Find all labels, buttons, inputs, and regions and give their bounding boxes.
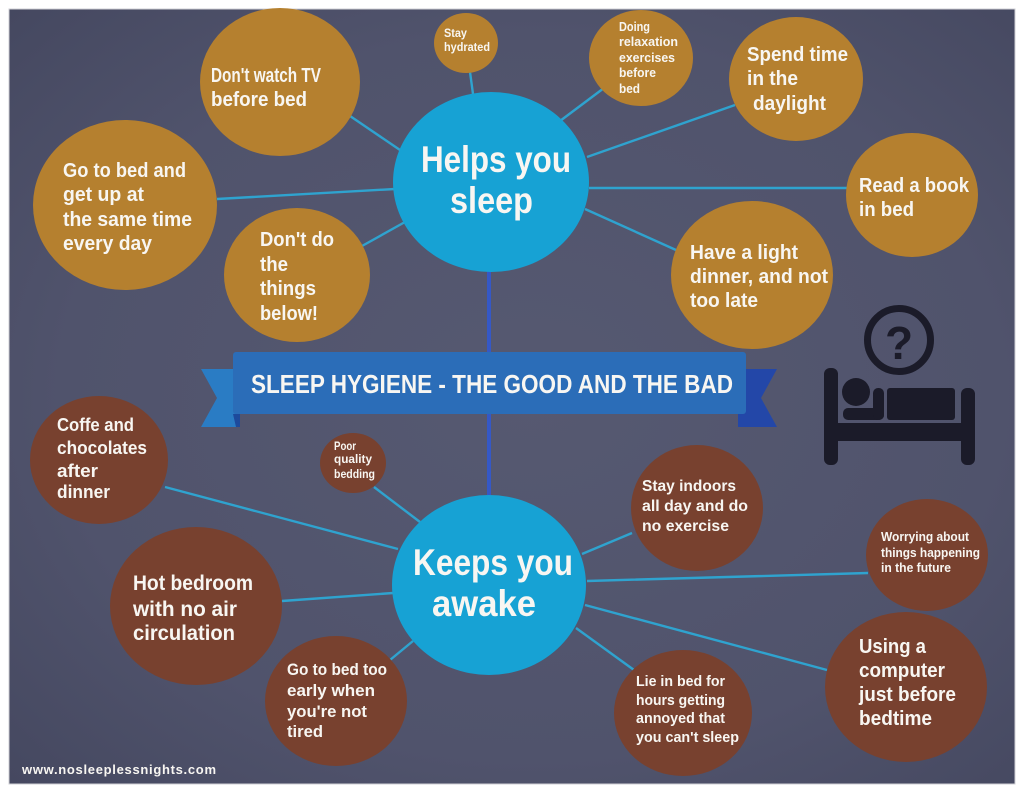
bubble: relaxation exercises: bed: [619, 81, 640, 96]
bubble: computer before bedtime: [825, 612, 987, 762]
bubble: poor bedding: quality: [334, 452, 372, 466]
bubble: computer before bedtime: bedtime: [859, 708, 932, 730]
icon: person awake in bed with question mark: [824, 308, 975, 465]
icon: person awake in bed with question mark: ?: [885, 317, 913, 369]
bubble: lying awake: annoyed that: [636, 710, 725, 727]
bubble: relaxation exercises: [589, 10, 693, 106]
bubble: daylight: Spend time: [747, 44, 848, 66]
bubble: read a book: in bed: [859, 199, 914, 221]
bubble: stay hydrated: hydrated: [444, 40, 490, 54]
bubble: worrying: Worrying about: [881, 529, 970, 544]
bubble: lying awake: Lie in bed for: [636, 673, 725, 690]
bubble: stay hydrated: [434, 13, 498, 73]
bubble: stay indoors: all day and do: [642, 498, 748, 515]
central connector: [487, 270, 491, 497]
bubble: regular bedtime: [33, 120, 217, 290]
bubble: coffee and chocolates: dinner: [57, 482, 110, 502]
hub: helps you sleep: [393, 92, 589, 272]
bubble: don't do the things below: below!: [260, 303, 318, 325]
bubble: stay indoors: no exercise: [642, 518, 729, 535]
bubble: regular bedtime: every day: [63, 233, 153, 255]
bubble: worrying: [866, 499, 988, 611]
bubble: relaxation exercises: Doing: [619, 19, 650, 34]
bubble: too early to bed: tired: [287, 722, 323, 741]
bubble: light dinner: Have a light: [690, 242, 798, 264]
bubble: read a book: [846, 133, 978, 257]
bubble: stay indoors: [631, 445, 763, 571]
bubble: poor bedding: bedding: [334, 467, 375, 481]
bubble: regular bedtime: the same time: [63, 209, 192, 231]
bubble: coffee and chocolates: [30, 396, 168, 524]
hub: helps you sleep: sleep: [450, 180, 533, 221]
bubble: too early to bed: Go to bed too: [287, 660, 387, 679]
bubble: read a book: Read a book: [859, 175, 970, 197]
bubble: light dinner: too late: [690, 290, 758, 312]
bubble: daylight: in the: [747, 68, 798, 90]
bubble: poor bedding: Poor: [334, 439, 356, 453]
hub: keeps you awake: awake: [432, 583, 536, 624]
bubble: light dinner: [671, 201, 833, 349]
hub: helps you sleep: Helps you: [421, 139, 571, 180]
bubble: computer before bedtime: computer: [859, 660, 945, 682]
bubble: hot bedroom: with no air: [132, 598, 237, 621]
bubble: lying awake: you can't sleep: [636, 729, 739, 746]
bubble: hot bedroom: [110, 527, 282, 685]
hub: keeps you awake: [392, 495, 586, 675]
bubble: computer before bedtime: just before: [858, 684, 956, 706]
bubble: lying awake: hours getting: [636, 692, 725, 709]
bubble: stay indoors: Stay indoors: [642, 478, 736, 495]
bubble: lying awake: [614, 650, 752, 776]
bubble: don't watch TV: before bed: [211, 89, 307, 111]
hub: keeps you awake: Keeps you: [413, 542, 573, 583]
bubble: relaxation exercises: before: [619, 65, 656, 80]
title ribbon: [201, 352, 777, 427]
bubble: don't do the things below: [224, 208, 370, 342]
bubble: coffee and chocolates: chocolates: [57, 438, 147, 458]
bubble: don't watch TV: [200, 8, 360, 156]
bubble: don't watch TV: Don't watch TV: [211, 65, 321, 87]
bubble: coffee and chocolates: Coffe and: [57, 415, 134, 435]
bubble: regular bedtime: get up at: [63, 184, 144, 206]
bubble: computer before bedtime: Using a: [859, 636, 927, 658]
bubble: worrying: in the future: [881, 560, 951, 575]
bubble: regular bedtime: Go to bed and: [63, 160, 186, 182]
bubble: don't do the things below: the: [260, 254, 288, 276]
bubble: don't do the things below: Don't do: [260, 229, 334, 251]
bubble: worrying: things happening: [881, 545, 980, 560]
bubble: daylight: daylight: [753, 93, 826, 115]
bubble: don't do the things below: things: [260, 278, 316, 300]
bubble: too early to bed: you're not: [287, 702, 367, 721]
connector lines: [165, 72, 868, 670]
bubble: hot bedroom: circulation: [133, 622, 235, 645]
title: SLEEP HYGIENE - THE GOOD AND THE BAD: [251, 369, 733, 399]
bubble: light dinner: dinner, and not: [690, 266, 828, 288]
bubble: too early to bed: early when: [287, 681, 375, 700]
website credit: www.nosleeplessnights.com: [21, 762, 216, 777]
bubble: stay hydrated: Stay: [444, 26, 467, 40]
bubble: too early to bed: [265, 636, 407, 766]
bubble: hot bedroom: Hot bedroom: [133, 572, 253, 595]
bubble: poor bedding: [320, 433, 386, 493]
bubble: daylight: [729, 17, 863, 141]
bubble: relaxation exercises: relaxation: [619, 34, 678, 49]
bubble: coffee and chocolates: after: [57, 461, 98, 481]
bubble: relaxation exercises: exercises: [619, 50, 675, 65]
